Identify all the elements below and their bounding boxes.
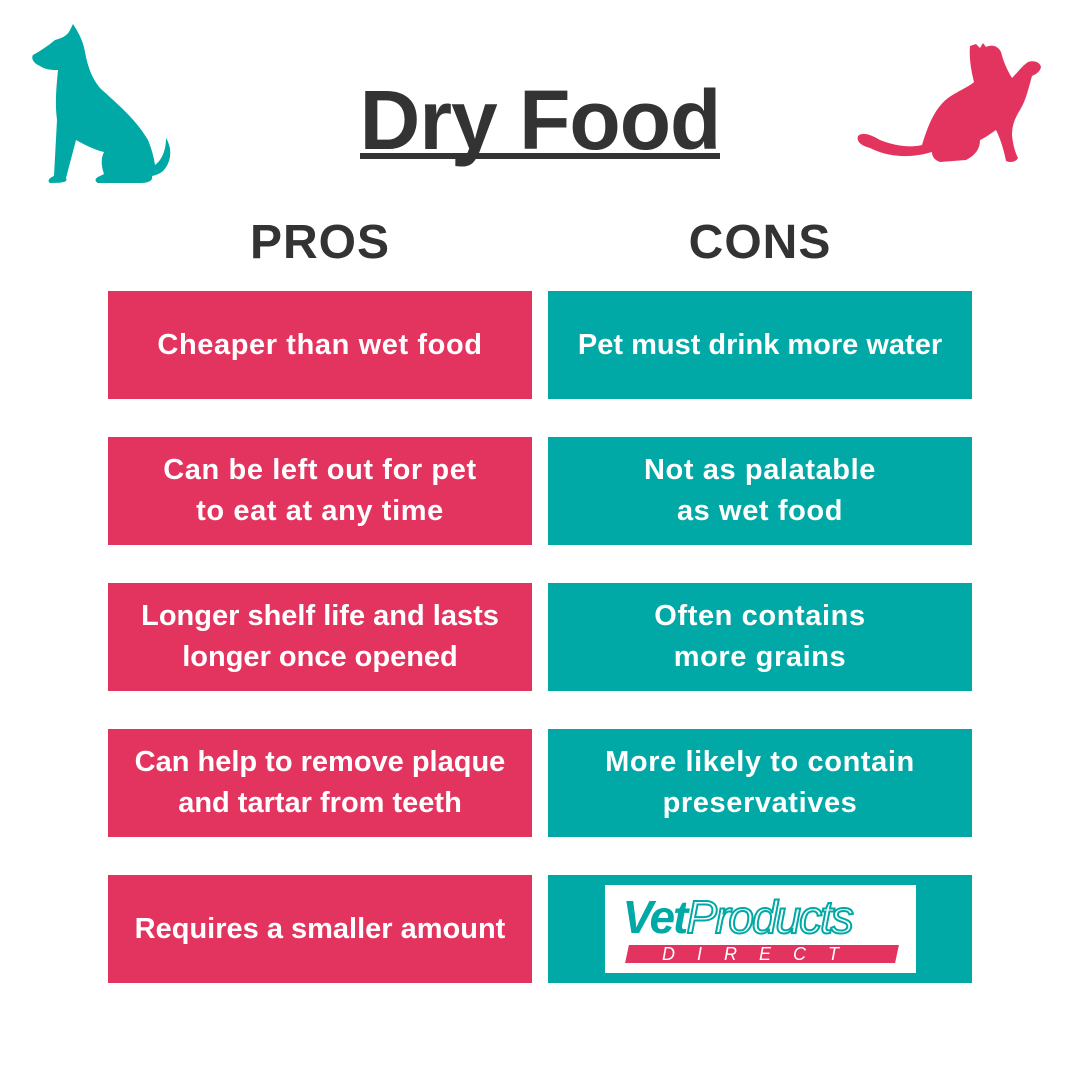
heading: cons: CONS (689, 216, 831, 269)
icon: cat (858, 43, 1041, 162)
pro 2 (108, 437, 532, 545)
pro 5 (108, 875, 532, 983)
pro 4: Can help to remove plaque (135, 746, 505, 778)
con 3: Often contains (654, 600, 866, 632)
pro 5: Requires a smaller amount (135, 912, 505, 944)
logo: DIRECT (662, 944, 861, 964)
title: Dry Food (360, 73, 720, 167)
logo (604, 885, 916, 973)
con 4: preservatives (663, 787, 857, 819)
con 4 (548, 729, 972, 837)
con 3 (548, 583, 972, 691)
con 4: More likely to contain (605, 746, 915, 778)
pro 1 (108, 291, 532, 399)
icon: dog (32, 24, 170, 183)
logo panel (548, 875, 972, 983)
pro 4 (108, 729, 532, 837)
pro 4: and tartar from teeth (178, 787, 462, 819)
con 3: more grains (674, 641, 846, 673)
con 2 (548, 437, 972, 545)
pro 3: longer once opened (182, 641, 458, 673)
con 1: Pet must drink more water (578, 328, 942, 360)
pro 1: Cheaper than wet food (157, 328, 483, 360)
pro 3 (108, 583, 532, 691)
con 1 (548, 291, 972, 399)
con 2: as wet food (677, 495, 843, 527)
con 2: Not as palatable (644, 454, 876, 486)
pro 2: to eat at any time (196, 495, 444, 527)
pro 2: Can be left out for pet (163, 454, 477, 486)
heading: pros: PROS (250, 216, 390, 269)
pro 3: Longer shelf life and lasts (141, 600, 499, 632)
logo: VetProducts (622, 891, 852, 943)
